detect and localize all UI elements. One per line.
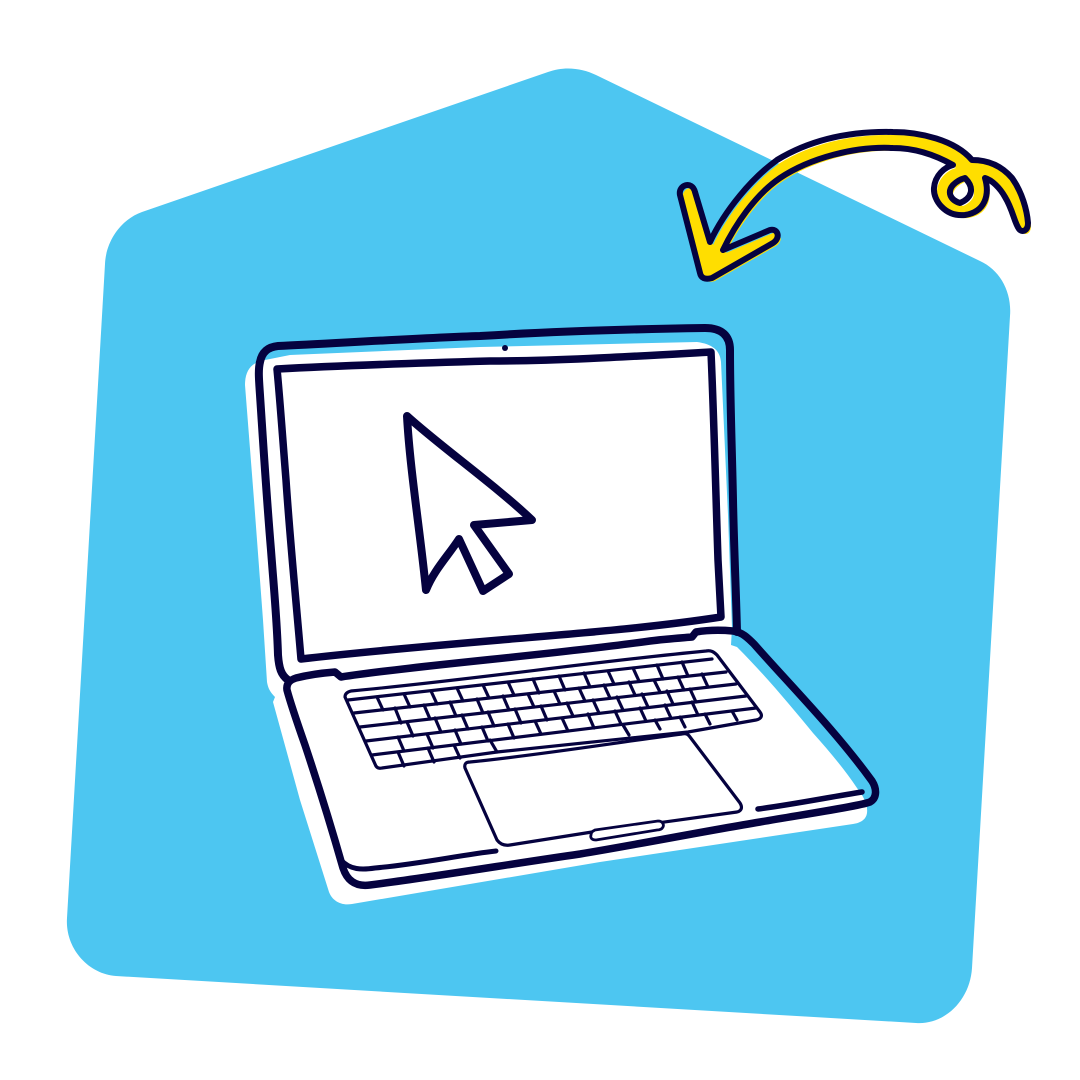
keyboard row lines	[348, 659, 756, 755]
icon: mouse cursor arrow	[407, 416, 532, 591]
panel: blue house-shaped background	[67, 68, 1010, 1023]
laptop illustration	[245, 328, 876, 904]
laptop base outline	[287, 630, 876, 885]
webcam dot	[502, 345, 508, 351]
trackpad	[465, 734, 741, 845]
trackpad click bar	[591, 821, 663, 840]
laptop lid outline	[259, 328, 737, 680]
keyboard key separators	[377, 662, 737, 766]
arrow dark outline	[680, 132, 1028, 279]
white offset fill of laptop	[245, 342, 867, 904]
palm rest front edge lines	[341, 792, 862, 869]
arrow yellow fill	[683, 135, 1031, 282]
arrow: curved yellow hand-drawn arrow	[680, 132, 1031, 282]
keyboard outline	[345, 651, 761, 768]
laptop screen border	[277, 352, 721, 659]
keyboard	[345, 651, 761, 768]
